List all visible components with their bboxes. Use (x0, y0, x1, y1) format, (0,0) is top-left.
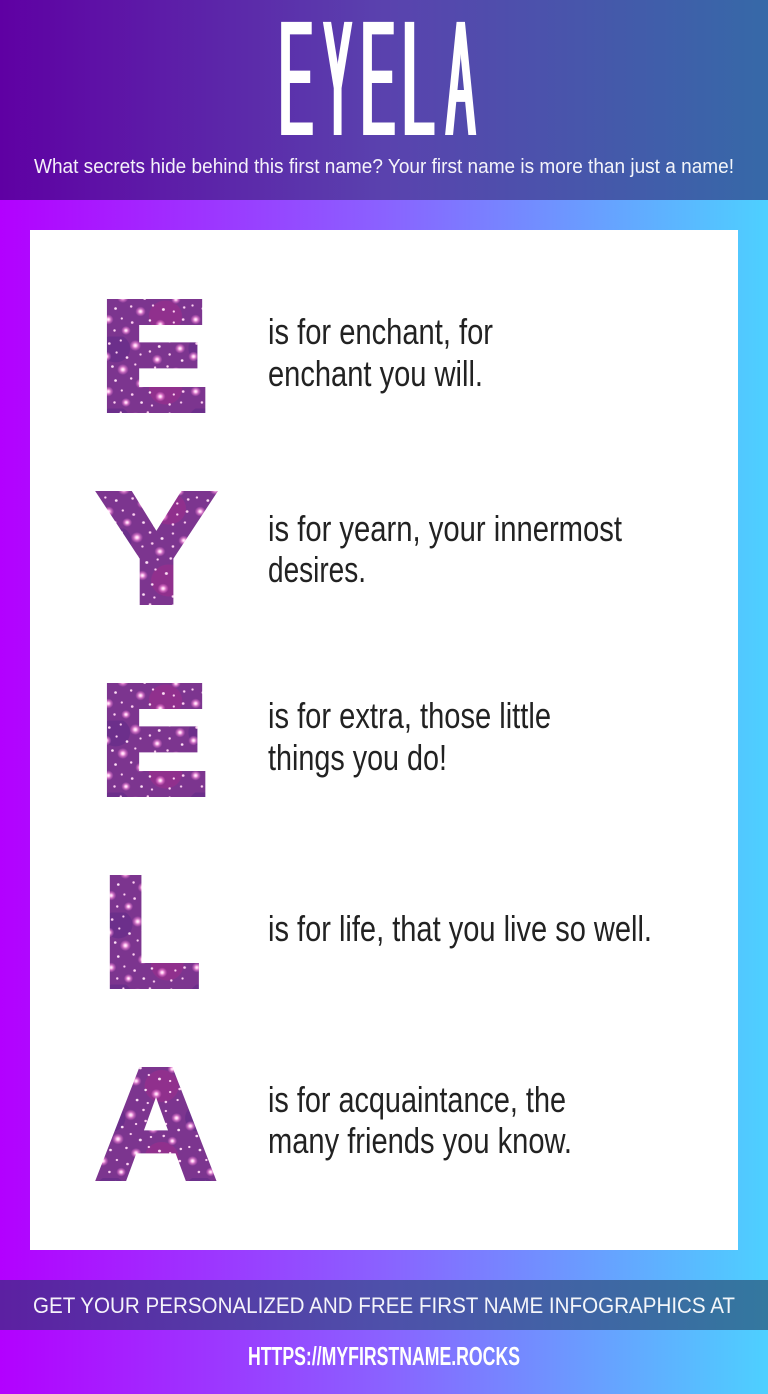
galaxy letter Y: Y (101, 463, 212, 633)
text: yearn (268, 508, 622, 590)
text: yearn: is for yearn, your innermost (268, 508, 622, 549)
footer url: HTTPS://MYFIRSTNAME.ROCKS (248, 1341, 520, 1371)
title (279, 0, 474, 171)
text: enchant: is for enchant, for (268, 311, 493, 352)
galaxy letter E: E (101, 654, 207, 825)
text: acquaintance (268, 1079, 572, 1161)
text: extra (268, 695, 551, 778)
text: acquaintance: many friends you know. (268, 1120, 572, 1161)
footer band (0, 1280, 768, 1330)
galaxy letter E: E (101, 270, 207, 441)
row: letter L (104, 846, 652, 1017)
text: enchant (268, 311, 493, 394)
white card panel (30, 230, 738, 1250)
row: letter A (96, 1037, 572, 1212)
row: letter E (101, 270, 493, 441)
text: yearn: desires. (268, 549, 366, 590)
text: life: is for life, that you live so well. (268, 908, 652, 949)
header band (0, 0, 768, 200)
text: enchant: enchant you will. (268, 353, 483, 394)
galaxy letter A: A (96, 1037, 216, 1212)
text: acquaintance: is for acquaintance, the (268, 1079, 566, 1120)
row: letter Y (101, 463, 622, 633)
text: extra: is for extra, those little (268, 695, 551, 736)
text: extra: things you do! (268, 737, 447, 778)
galaxy letter L: L (104, 846, 199, 1017)
subtitle: What secrets hide behind this first name? Your first name is more than just a name! (34, 156, 734, 178)
row: letter E second (101, 654, 551, 825)
footer call to action: GET YOUR PERSONALIZED AND FREE FIRST NAME INFOGRAPHICS AT (33, 1293, 735, 1318)
